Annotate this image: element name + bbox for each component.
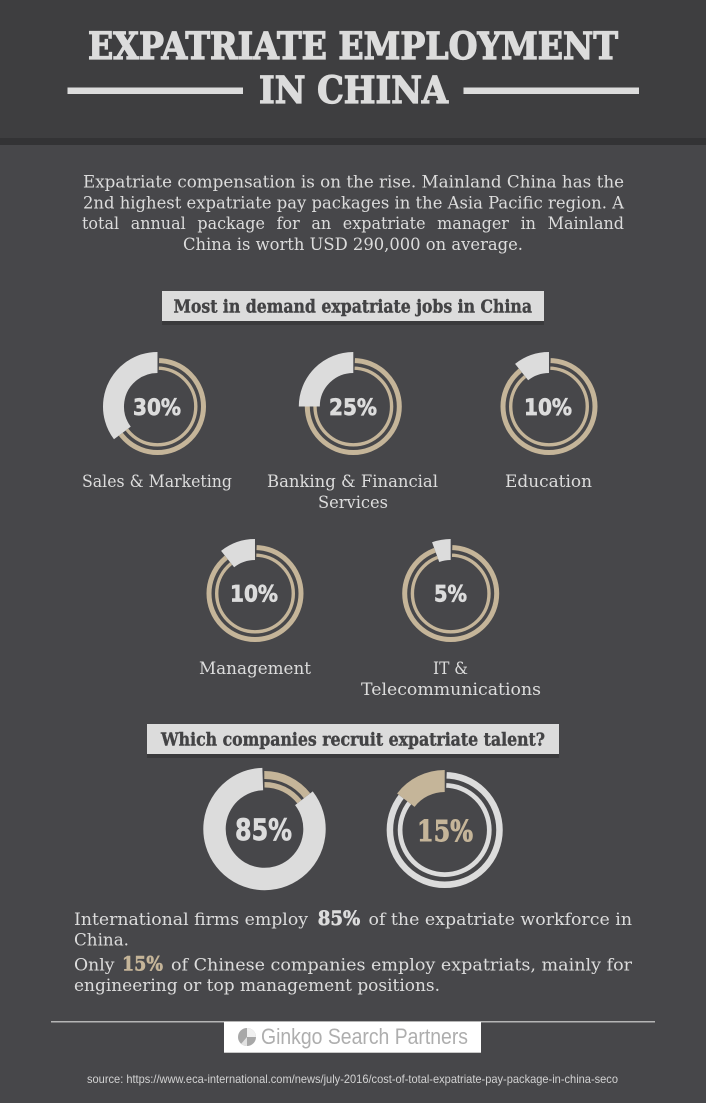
label: IT and telecommunications: Telecommunications (361, 680, 541, 700)
label: IT and telecommunications: IT & (433, 659, 468, 679)
donut: management 10%: 10% (230, 583, 278, 608)
logo box (224, 1022, 481, 1053)
donut: sales and marketing 30% (96, 345, 219, 468)
title (68, 24, 639, 112)
intro text: Expatriate compensation is on the rise. Mainland China has the (83, 173, 624, 193)
closing paragraph: of the expatriate workforce in (368, 910, 632, 930)
closing paragraph: Only (74, 956, 115, 976)
logo box: Ginkgo Search Partners (261, 1024, 468, 1049)
label: banking and financial services (267, 472, 438, 513)
closing paragraph: 85% (318, 906, 360, 930)
donut: chinese companies 15%: 15% (417, 814, 473, 848)
donut: chinese companies 15% (376, 761, 513, 899)
label: banking and financial services: Services (318, 493, 388, 513)
source line: source: https://www.eca-international.com/news/july-2016/cost-of-total-expatriate-pay-package-in-china-seco (87, 1072, 618, 1086)
heading: most in demand jobs: Most in demand expatriate jobs in China (174, 298, 532, 318)
donut: education 10%: 10% (524, 396, 572, 421)
heading: which companies recruit: Which companies recruit expatriate talent? (160, 731, 545, 751)
icon: ginkgo logo (238, 1028, 256, 1046)
title: IN CHINA (259, 68, 449, 112)
label: sales and marketing: Sales & Marketing (82, 472, 232, 492)
intro text: China is worth USD 290,000 on average. (183, 235, 523, 255)
label: management: Management (199, 659, 311, 679)
intro text: 2nd highest expatriate pay packages in the Asia Pacific region. A (83, 193, 625, 213)
donut: education 10% (487, 345, 611, 468)
donut: management 10% (193, 532, 317, 655)
title: EXPATRIATE EMPLOYMENT (88, 24, 618, 68)
footer divider (51, 1021, 655, 1022)
intro text (82, 173, 625, 255)
header band (0, 0, 706, 145)
donut: sales and marketing 30%: 30% (133, 396, 181, 421)
donut: IT 5%: 5% (434, 583, 467, 608)
donut: international firms 85%: 85% (235, 813, 292, 847)
heading: most in demand jobs (162, 291, 544, 325)
closing paragraph: of Chinese companies employ expatriats, mainly for (171, 956, 633, 976)
donut: international firms 85% (194, 759, 335, 899)
closing paragraph: China. (74, 931, 129, 951)
donut: banking 25%: 25% (329, 396, 377, 421)
closing paragraph: International firms employ (74, 910, 308, 930)
intro text: total annual package for an expatriate manager in Mainland (82, 214, 624, 234)
label: IT and telecommunications (361, 659, 541, 700)
closing paragraph (74, 906, 633, 996)
donut: IT 5% (394, 537, 507, 650)
closing paragraph: engineering or top management positions. (74, 976, 440, 996)
label: banking and financial services: Banking & Financial (267, 472, 438, 492)
closing paragraph: 15% (122, 952, 163, 976)
heading: which companies recruit (147, 724, 559, 758)
donut: banking 25% (307, 360, 399, 452)
label: education: Education (505, 472, 592, 492)
